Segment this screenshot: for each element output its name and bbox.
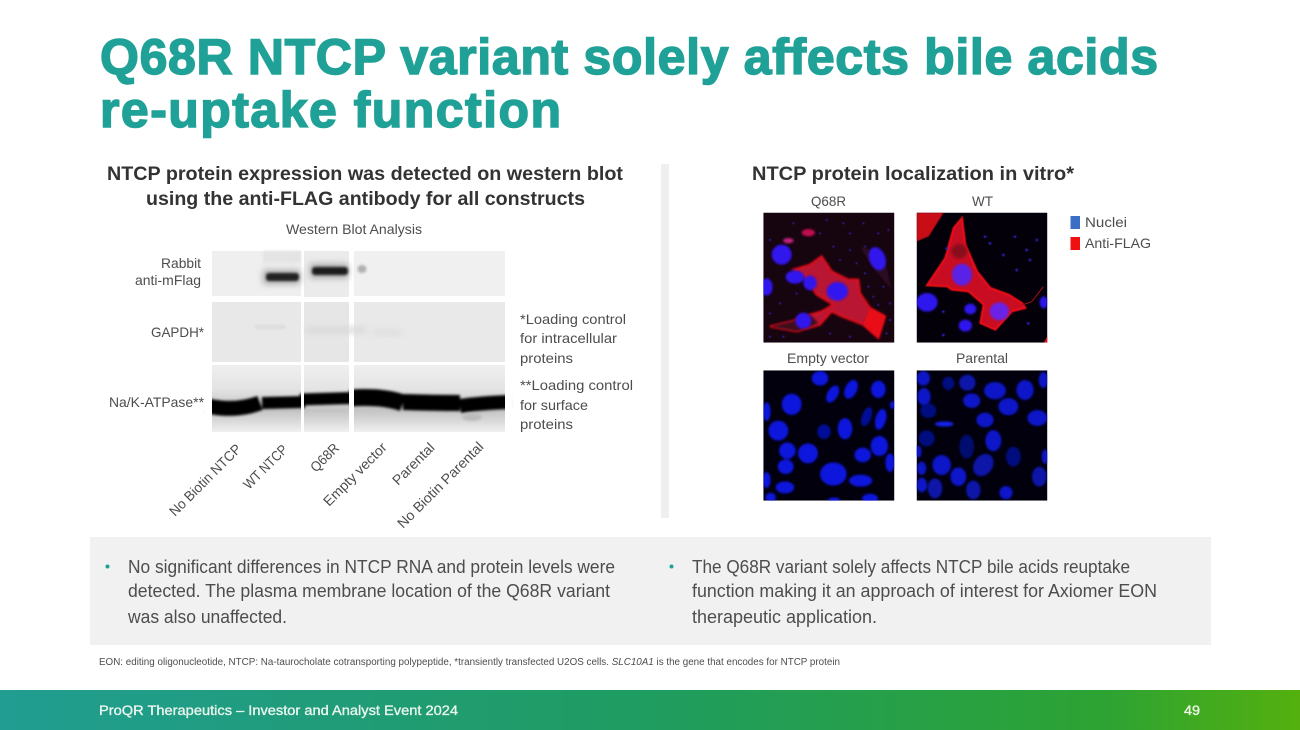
row labels: Na/K-ATPase** [109,394,205,410]
row labels [109,255,205,410]
micrographs [761,213,1048,503]
loading control notes: for intracellular [520,330,617,346]
title: re-uptake function [100,82,561,138]
footer bar [0,690,1300,730]
heading: western blot: NTCP protein expression was detected on western blot [107,163,624,185]
blot image [205,251,512,434]
heading: localization: NTCP protein localization in vitro* [752,163,1074,185]
bullet right: therapeutic application. [692,606,877,627]
lane labels: Parental [389,439,438,488]
loading control notes: proteins [520,416,573,432]
lane labels: WT NTCP [240,441,291,492]
chart title: Western Blot Analysis [286,221,422,237]
image labels: Parental [956,350,1008,366]
legend: Anti-FLAG [1085,235,1151,251]
micrograph: Empty vector [763,370,895,503]
image labels: Empty vector [787,350,869,366]
title: Q68R NTCP variant solely affects bile acids [100,29,1158,85]
bullet left: detected. The plasma membrane location of the Q68R variant [128,580,610,601]
micrograph: WT [916,213,1048,343]
panel: localization [752,163,1151,503]
bullet right [670,556,1157,627]
heading: western blot: using the anti-FLAG antibody for all constructs [146,188,585,210]
bullet left [106,556,615,627]
loading control notes: *Loading control [520,311,626,327]
footer bar: 49 [1184,702,1200,718]
panel: western blot [107,163,633,531]
loading control notes: proteins [520,350,573,366]
row labels: Rabbit [161,255,201,271]
row labels: anti-mFlag [135,272,201,288]
loading control notes [520,311,633,432]
bullet left: No significant differences in NTCP RNA and protein levels were [128,556,615,577]
image labels: WT [972,193,993,209]
bullet right: The Q68R variant solely affects NTCP bile acids reuptake [692,556,1130,577]
lane labels: Empty vector [320,439,390,509]
image labels [787,193,1008,366]
lane labels: Q68R [307,440,342,475]
footer bar: ProQR Therapeutics – Investor and Analyst Event 2024 [99,702,458,718]
heading: western blot [107,163,624,210]
bullet right: function making it an approach of interest for Axiomer EON [692,580,1157,601]
lane labels: No Biotin NTCP [166,441,244,519]
legend [1070,214,1151,251]
micrograph: Parental [915,370,1048,501]
loading control notes: for surface [520,397,588,413]
bullet left: was also unaffected. [127,606,287,627]
legend: Nuclei [1085,214,1127,230]
image labels: Q68R [811,193,846,209]
lane labels [166,438,486,531]
loading control notes: **Loading control [520,377,633,393]
panel: key takeaways [90,537,1211,645]
micrograph: Q68R [761,213,894,343]
title [100,29,1158,138]
lane labels: No Biotin Parental [394,438,486,531]
row labels: GAPDH* [151,324,205,340]
footnote: EON: editing oligonucleotide, NTCP: Na-taurocholate cotransporting polypeptide, *transiently transfected U2OS cells. SLC10A1 is the gene that encodes for NTCP protein [99,657,840,668]
